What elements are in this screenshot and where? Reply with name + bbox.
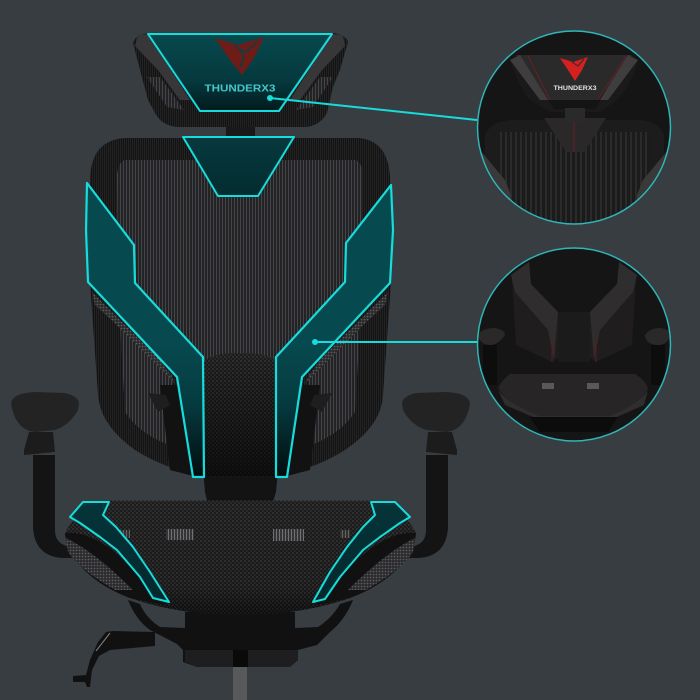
detail seat [498,374,648,416]
right armrest [402,392,470,558]
headrest neck [226,124,255,140]
detail logo [560,57,588,81]
chair illustration [11,33,470,700]
teal zone: upper back [183,137,294,196]
teal zone: headrest [148,34,332,111]
teal zone: left back wing [86,183,204,477]
headrest brand text: THUNDERX3 [204,84,276,94]
backrest [90,138,391,476]
detail back wings [512,283,558,362]
detail circle: headrest [477,30,671,230]
seat back support [203,470,278,505]
detail backrest [485,120,664,230]
teal zone: right back wing [276,185,393,477]
teal zone: left seat [70,502,169,602]
detail headrest [510,55,638,112]
callout line: back wing [312,339,477,345]
chair base pole [233,665,247,700]
detail brand text: THUNDERX3 [554,85,597,92]
detail circle: back and seat [477,248,671,442]
teal zone: right seat [313,502,410,602]
seat [65,500,416,615]
tilt lever [73,631,155,687]
headrest [133,33,348,127]
seat mechanism [128,600,353,667]
callout line: headrest [267,95,477,120]
detail armrests [478,328,505,345]
headrest logo [215,37,264,75]
left armrest [11,392,79,558]
